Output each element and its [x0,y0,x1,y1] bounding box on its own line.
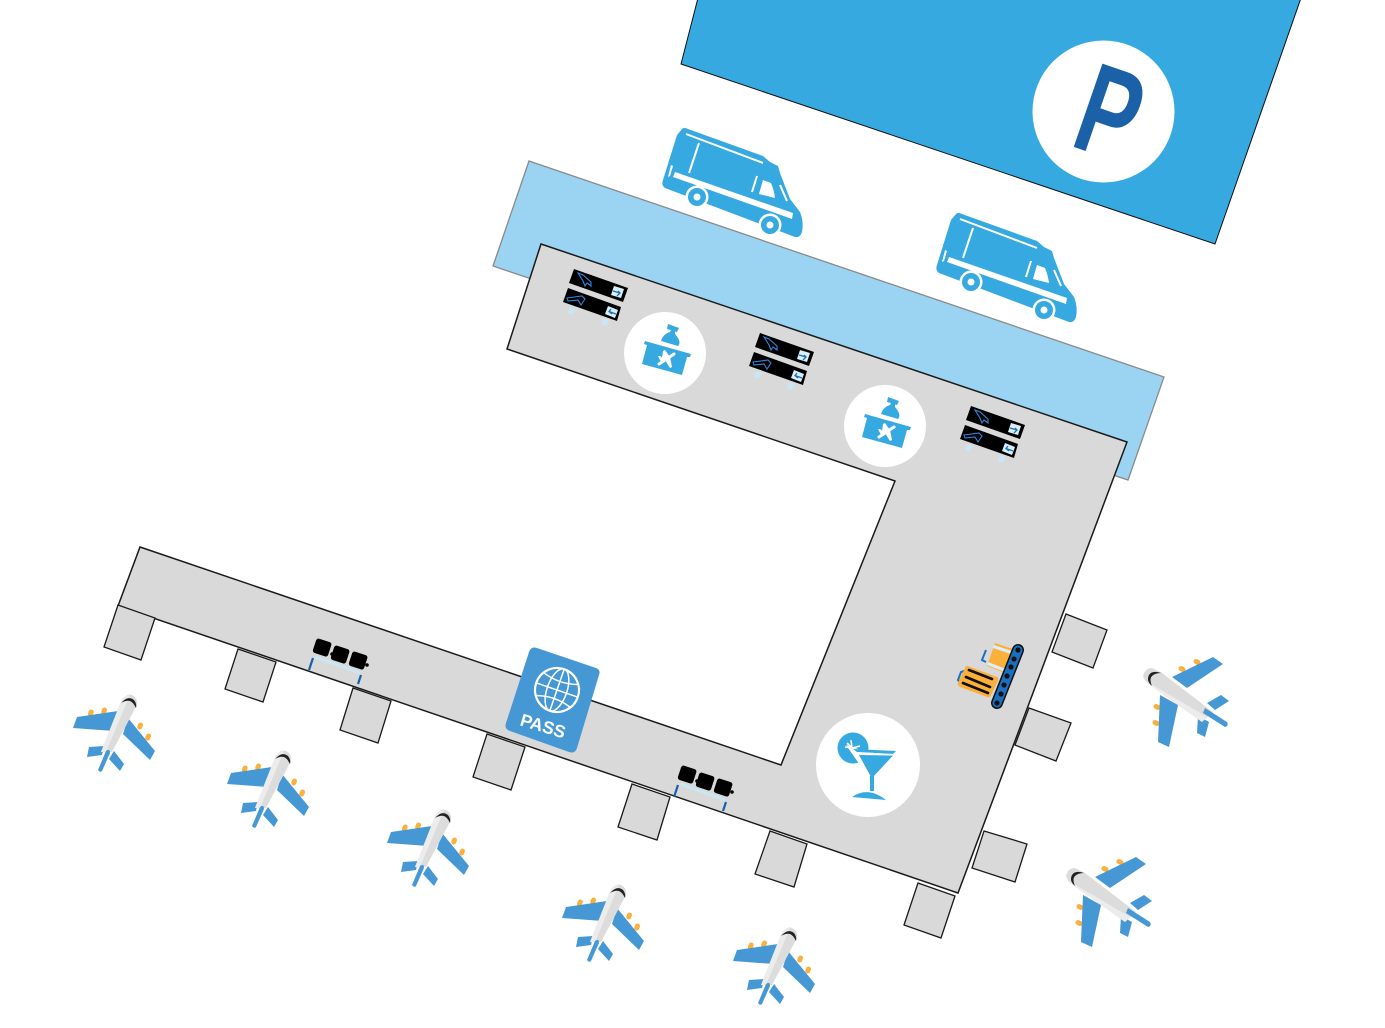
airplane 5 [733,928,815,1005]
seats 1 [309,638,369,684]
flight board 3 [960,406,1025,463]
check-in desk 2 [844,385,926,467]
baggage claim [958,643,1021,706]
passport control: PASS [518,710,568,742]
terminal building [118,244,1127,893]
check-in desk 1 [624,312,706,394]
van 2 [936,213,1077,322]
gates [104,605,1107,938]
airplane 7 [1066,857,1152,947]
passport control [506,648,600,752]
airplane 4 [562,884,644,962]
flight board 2 [749,333,814,390]
seats 2 [674,765,734,811]
airplane 6 [1143,657,1229,747]
bar / lounge [816,713,920,817]
airplane 1 [73,694,155,772]
parking sign: P [1059,37,1160,190]
van 1 [662,128,803,237]
parking area [681,0,1301,244]
flight board 1 [563,269,628,326]
curbside zone [493,161,1164,480]
airplane 3 [387,810,469,887]
airplane 2 [227,750,309,828]
